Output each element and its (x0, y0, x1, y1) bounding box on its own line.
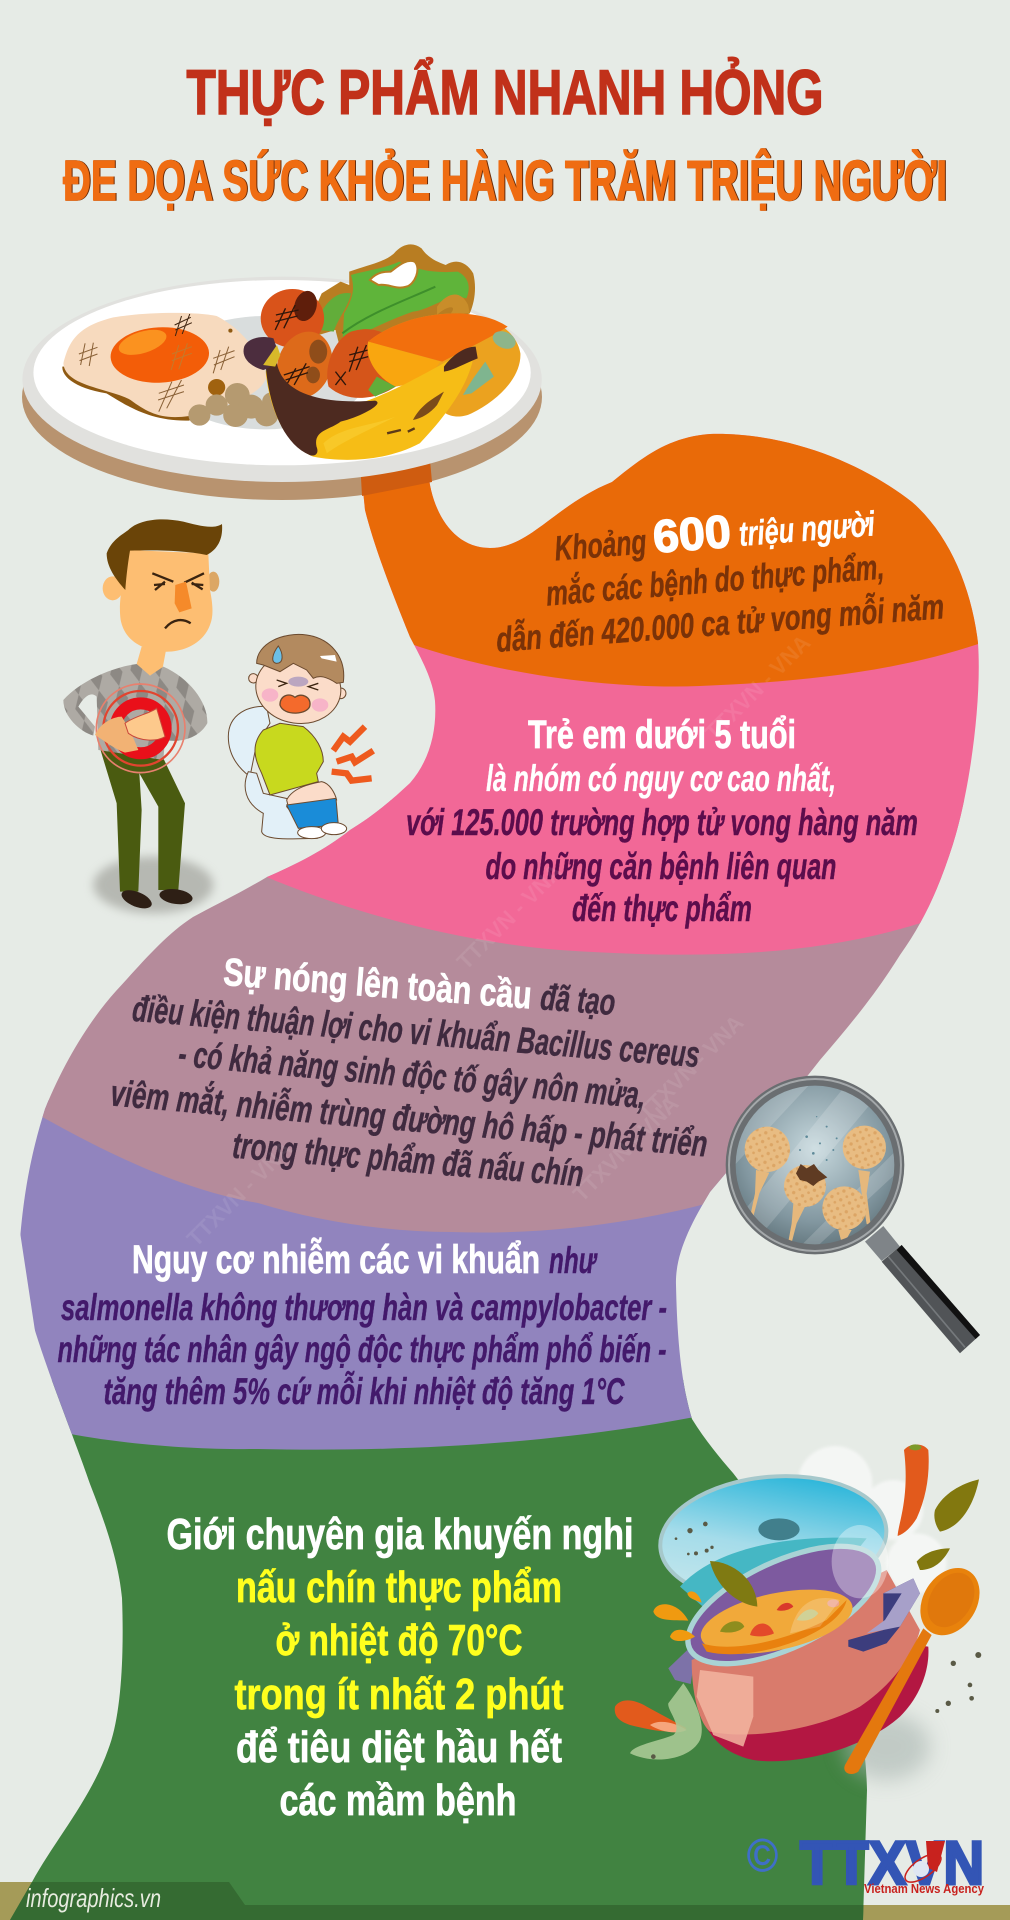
logo: TTXVN (747, 1829, 985, 1897)
text: recommendation: trong ít nhất 2 phút (234, 1670, 564, 1719)
text: 600 million: Khoảng (553, 522, 648, 569)
nuts (188, 383, 281, 427)
pot opening (671, 1522, 895, 1688)
watermarks (182, 630, 815, 1251)
mango (368, 313, 520, 416)
handle (865, 1226, 980, 1353)
lens frame (726, 1076, 904, 1254)
plate top (33, 280, 531, 465)
footer band: olive strip (0, 1882, 1010, 1920)
sweat drop (273, 646, 282, 663)
agency name: Vietnam News Agency (864, 1881, 985, 1896)
text: recommendation: nấu chín thực phẩm (236, 1563, 562, 1612)
leaf (710, 1561, 757, 1607)
ears (103, 576, 123, 600)
right handle (848, 1578, 920, 1652)
banana (244, 337, 478, 460)
carrot top right (898, 1444, 929, 1536)
plate shadow side (22, 294, 542, 500)
text: global warming (109, 951, 709, 1194)
text: recommendation: các mầm bệnh (280, 1776, 516, 1825)
bacterium 2 (843, 1126, 886, 1225)
text: children: là nhóm có nguy cơ cao nhất, (486, 758, 836, 799)
cheeks (262, 688, 278, 702)
shorts (287, 798, 338, 828)
text: children: Trẻ em dưới 5 tuổi (528, 713, 796, 757)
text: bacteria risk: Nguy cơ nhiễm các vi khuẩn (132, 1236, 540, 1282)
text: 600 million (495, 493, 945, 660)
footer dark band (10, 1882, 864, 1920)
bacterium 3 (784, 1164, 827, 1243)
vegetables in soup (720, 1599, 839, 1636)
leaves right (934, 1479, 979, 1532)
hair (107, 519, 222, 590)
text: global warming: Sự nóng lên toàn cầu (222, 951, 533, 1018)
text: global warming: - có khả năng sinh độc tố gây nôn mửa, (177, 1033, 648, 1116)
text: children (406, 713, 918, 929)
lid (655, 1467, 892, 1610)
neck (137, 647, 167, 676)
panel: green recommendation (10, 1380, 867, 1920)
text: global warming: viêm mắt, nhiễm trùng đường hô hấp - phát triển (109, 1072, 709, 1165)
toilet (228, 706, 270, 777)
eyes (277, 680, 318, 690)
stomach pain rings (96, 684, 185, 773)
shoes (298, 827, 326, 839)
hands (95, 717, 138, 753)
copyright mark: © (747, 1829, 778, 1881)
title line 1: THỰC PHẨM NHANH HỎNG (186, 57, 824, 128)
plate rim (22, 277, 542, 482)
bacterium 1 (745, 1127, 790, 1217)
text: bacteria risk: như (549, 1240, 598, 1281)
face (120, 550, 212, 652)
panel: purple risk (20, 1100, 726, 1450)
watermarks: TTXVN - VNA (452, 859, 567, 974)
text: 600 million: triệu người (737, 504, 877, 554)
icon: sick man (63, 519, 222, 913)
icon: plate of spoiled food (22, 244, 542, 482)
icon: soup pot (615, 1444, 992, 1780)
text: recommendation: Giới chuyên gia khuyến nghị (166, 1510, 634, 1559)
text: children: đến thực phẩm (572, 888, 752, 929)
mouth (280, 695, 310, 713)
nose (175, 582, 192, 612)
watermarks: TTXVN - VNA (182, 1136, 297, 1251)
icon: sick child on toilet (228, 634, 373, 839)
lens view (736, 1086, 894, 1244)
text: bacteria risk: salmonella không thương hàn và campylobacter - (61, 1287, 667, 1328)
source: infographics.vn: infographics.vn (26, 1883, 161, 1913)
spoon (844, 1557, 992, 1774)
panel: orange 600 million (361, 434, 978, 686)
legs (287, 782, 337, 807)
text: children: do những căn bệnh liên quan (486, 846, 836, 887)
text: global warming: trong thực phẩm đã nấu chín (231, 1125, 585, 1194)
pain zigzags (332, 727, 373, 781)
text: global warming: điều kiện thuận lợi cho vi khuẩn Bacillus cereus (131, 988, 701, 1075)
glass lid overlay (832, 1525, 888, 1598)
sweater (63, 664, 207, 760)
text: recommendation: ở nhiệt độ 70°C (276, 1616, 522, 1665)
title (63, 57, 947, 213)
hair (257, 634, 344, 683)
text: recommendation: để tiêu diệt hầu hết (236, 1723, 562, 1772)
watermarks: TTXVN - VNA (700, 630, 815, 745)
soup (695, 1578, 858, 1665)
bacterium 4 (822, 1186, 866, 1243)
icon: magnifying glass with bacteria (717, 1073, 980, 1353)
green soup drip (630, 1683, 702, 1759)
text: bacteria risk: tăng thêm 5% cứ mỗi khi nhiệt độ tăng 1°C (104, 1371, 625, 1412)
tomato slices (261, 288, 396, 405)
pot bottom (693, 1630, 928, 1761)
panel: pink children (266, 434, 979, 955)
nose (288, 677, 308, 687)
shoes (119, 887, 154, 912)
face (249, 674, 258, 683)
left handle (668, 1650, 695, 1684)
text: bacteria risk (58, 1236, 667, 1412)
text: bacteria risk: những tác nhân gây ngộ độc thực phẩm phổ biến - (58, 1329, 666, 1370)
neck shadow (360, 460, 432, 496)
text: recommendation (166, 1510, 634, 1825)
steam (798, 1446, 947, 1593)
splashes (653, 1591, 702, 1641)
watermarks: TTXVN - VNA (633, 1010, 748, 1125)
trousers (100, 748, 185, 892)
fried egg (62, 313, 267, 421)
text: 600 million: 600 (651, 505, 733, 563)
eyes and mouth (152, 573, 204, 628)
lettuce (311, 244, 475, 360)
shadow (93, 857, 213, 913)
carrot piece (615, 1700, 687, 1732)
panel: mauve global warming (0, 800, 1010, 1233)
watermarks: TTXVN - VNA (568, 1091, 683, 1206)
text: global warming: đã tạo (539, 976, 617, 1023)
shadow (843, 1713, 930, 1780)
pot body (692, 1570, 920, 1735)
red V and globe (926, 1841, 945, 1872)
wordmark: TTXVN (800, 1829, 984, 1897)
shirt (255, 723, 323, 795)
pepper specks (651, 1652, 981, 1759)
